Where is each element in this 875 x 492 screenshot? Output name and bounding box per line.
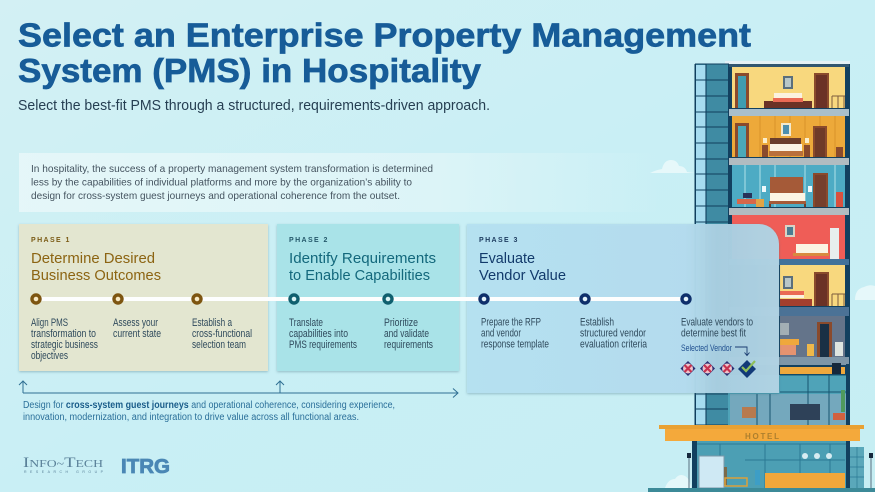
step: prioritize requirements bbox=[384, 317, 433, 351]
panel: phase 3: PHASE 3 bbox=[479, 237, 519, 244]
ground strip bbox=[648, 488, 875, 492]
step: assess current state: current state bbox=[113, 328, 161, 340]
phase 2 heading bbox=[289, 250, 436, 284]
step: align PMS: Align PMS bbox=[31, 317, 68, 329]
phase 1 heading bbox=[31, 250, 161, 284]
vendor icons bbox=[680, 360, 756, 378]
hotel sign bbox=[659, 425, 864, 441]
room 4 red bbox=[732, 215, 845, 259]
step: evaluate vendors: Evaluate vendors to bbox=[681, 316, 753, 328]
slab 2 bbox=[729, 158, 849, 165]
panel: phase 1: PHASE 1 bbox=[31, 237, 71, 244]
panel: phase 2: PHASE 2 bbox=[289, 237, 329, 244]
title: Select an Enterprise Property Management bbox=[18, 18, 751, 54]
roof line bbox=[725, 61, 850, 64]
step: selection team: Establish a bbox=[192, 317, 232, 329]
panel: phase 2 bbox=[277, 224, 459, 371]
panel: phase 1 bbox=[19, 224, 268, 371]
step: selection team: selection team bbox=[192, 339, 246, 351]
icon: selected vendor check bbox=[738, 360, 756, 378]
step: prepare RFP: Prepare the RFP bbox=[481, 316, 541, 328]
slab 5 bbox=[729, 307, 849, 316]
step: prepare RFP: response template bbox=[481, 338, 549, 350]
step: align PMS: strategic business bbox=[31, 339, 98, 351]
logo: Info-Tech Research Group: INFO~ TECH bbox=[23, 455, 103, 471]
phase 3 heading bbox=[479, 250, 566, 284]
step: translate capabilities: capabilities into bbox=[289, 328, 348, 340]
step: align PMS: objectives bbox=[31, 350, 68, 362]
step: prepare RFP bbox=[481, 316, 549, 350]
step: selection team: cross-functional bbox=[192, 328, 252, 340]
selected vendor label: Selected Vendor bbox=[681, 343, 732, 354]
room 5 yellow bbox=[780, 265, 845, 306]
intro text block: design for cross-system guest journeys and operational coherence from the outset. bbox=[31, 191, 400, 202]
step: prioritize requirements: Prioritize bbox=[384, 317, 418, 329]
hotel building illustration bbox=[648, 61, 875, 492]
step: translate capabilities bbox=[289, 317, 357, 351]
title bbox=[18, 18, 751, 90]
phase 2 heading: Identify Requirements bbox=[289, 250, 436, 267]
step: evaluation criteria: structured vendor bbox=[580, 328, 646, 340]
step: prioritize requirements: requirements bbox=[384, 339, 433, 351]
panel: phase 3 bbox=[467, 224, 779, 393]
intro text block: In hospitality, the success of a property management system transformation is determined bbox=[31, 164, 433, 175]
step: evaluate vendors: determine best fit bbox=[681, 328, 746, 340]
step: align PMS bbox=[31, 317, 98, 362]
icon: rejected vendor bbox=[680, 361, 696, 376]
slab 1 bbox=[729, 109, 849, 116]
arrows: timeline span bbox=[19, 381, 458, 398]
clouds bbox=[650, 160, 875, 488]
hotel sign: HOTEL bbox=[745, 432, 779, 441]
building frame bbox=[728, 64, 850, 394]
step: assess current state bbox=[113, 317, 161, 340]
logo: Info-Tech Research Group: RESEARCH GROUP bbox=[24, 470, 104, 474]
step: evaluation criteria bbox=[580, 316, 647, 350]
room 2 orange bbox=[732, 116, 845, 157]
intro text block bbox=[19, 153, 659, 212]
timeline bbox=[32, 295, 690, 303]
step: prepare RFP: and vendor bbox=[481, 328, 521, 340]
phase 1 nodes bbox=[32, 295, 201, 303]
slab 4 bbox=[729, 259, 849, 265]
step: assess current state: Assess your bbox=[113, 317, 158, 329]
glass tower bbox=[694, 64, 729, 426]
design note: Design for cross-system guest journeys and operational coherence, considering experience, bbox=[23, 400, 395, 411]
phase 3 heading: Evaluate bbox=[479, 250, 535, 267]
subtitle: Select the best-fit PMS through a structured, requirements-driven approach. bbox=[18, 98, 490, 114]
step: prioritize requirements: and validate bbox=[384, 328, 429, 340]
phase 2 heading: to Enable Capabilities bbox=[289, 267, 430, 284]
logo: ITRG: ITRG bbox=[121, 456, 170, 478]
title: System (PMS) in Hospitality bbox=[18, 53, 481, 90]
slab 3 bbox=[729, 208, 849, 215]
step: translate capabilities: PMS requirements bbox=[289, 339, 357, 351]
hotel lobby bbox=[687, 441, 873, 488]
icon: rejected vendor bbox=[720, 361, 734, 376]
design note bbox=[23, 400, 395, 423]
phase 3 nodes bbox=[480, 295, 690, 303]
phase 3 heading: Vendor Value bbox=[479, 267, 566, 284]
phase 2 nodes bbox=[290, 295, 392, 303]
room 6 grey bbox=[780, 316, 845, 357]
design note: innovation, modernization, and integration to drive value across all functional areas. bbox=[23, 412, 359, 423]
glass mezzanine floor bbox=[728, 357, 850, 426]
room 3 blue bbox=[732, 165, 845, 207]
step: align PMS: transformation to bbox=[31, 328, 96, 340]
icon: rejected vendor bbox=[700, 361, 715, 376]
room 1 yellow bbox=[732, 67, 845, 108]
phase 1 heading: Determine Desired bbox=[31, 250, 155, 267]
step: evaluate vendors bbox=[681, 316, 753, 340]
step: translate capabilities: Translate bbox=[289, 317, 323, 329]
step: evaluation criteria: evaluation criteria bbox=[580, 338, 647, 350]
phase 1 heading: Business Outcomes bbox=[31, 267, 161, 284]
step: selection team bbox=[192, 317, 252, 351]
step: evaluation criteria: Establish bbox=[580, 316, 614, 328]
intro text block: less by the capabilities of individual platforms and more by the organization’s ability to bbox=[31, 178, 412, 188]
